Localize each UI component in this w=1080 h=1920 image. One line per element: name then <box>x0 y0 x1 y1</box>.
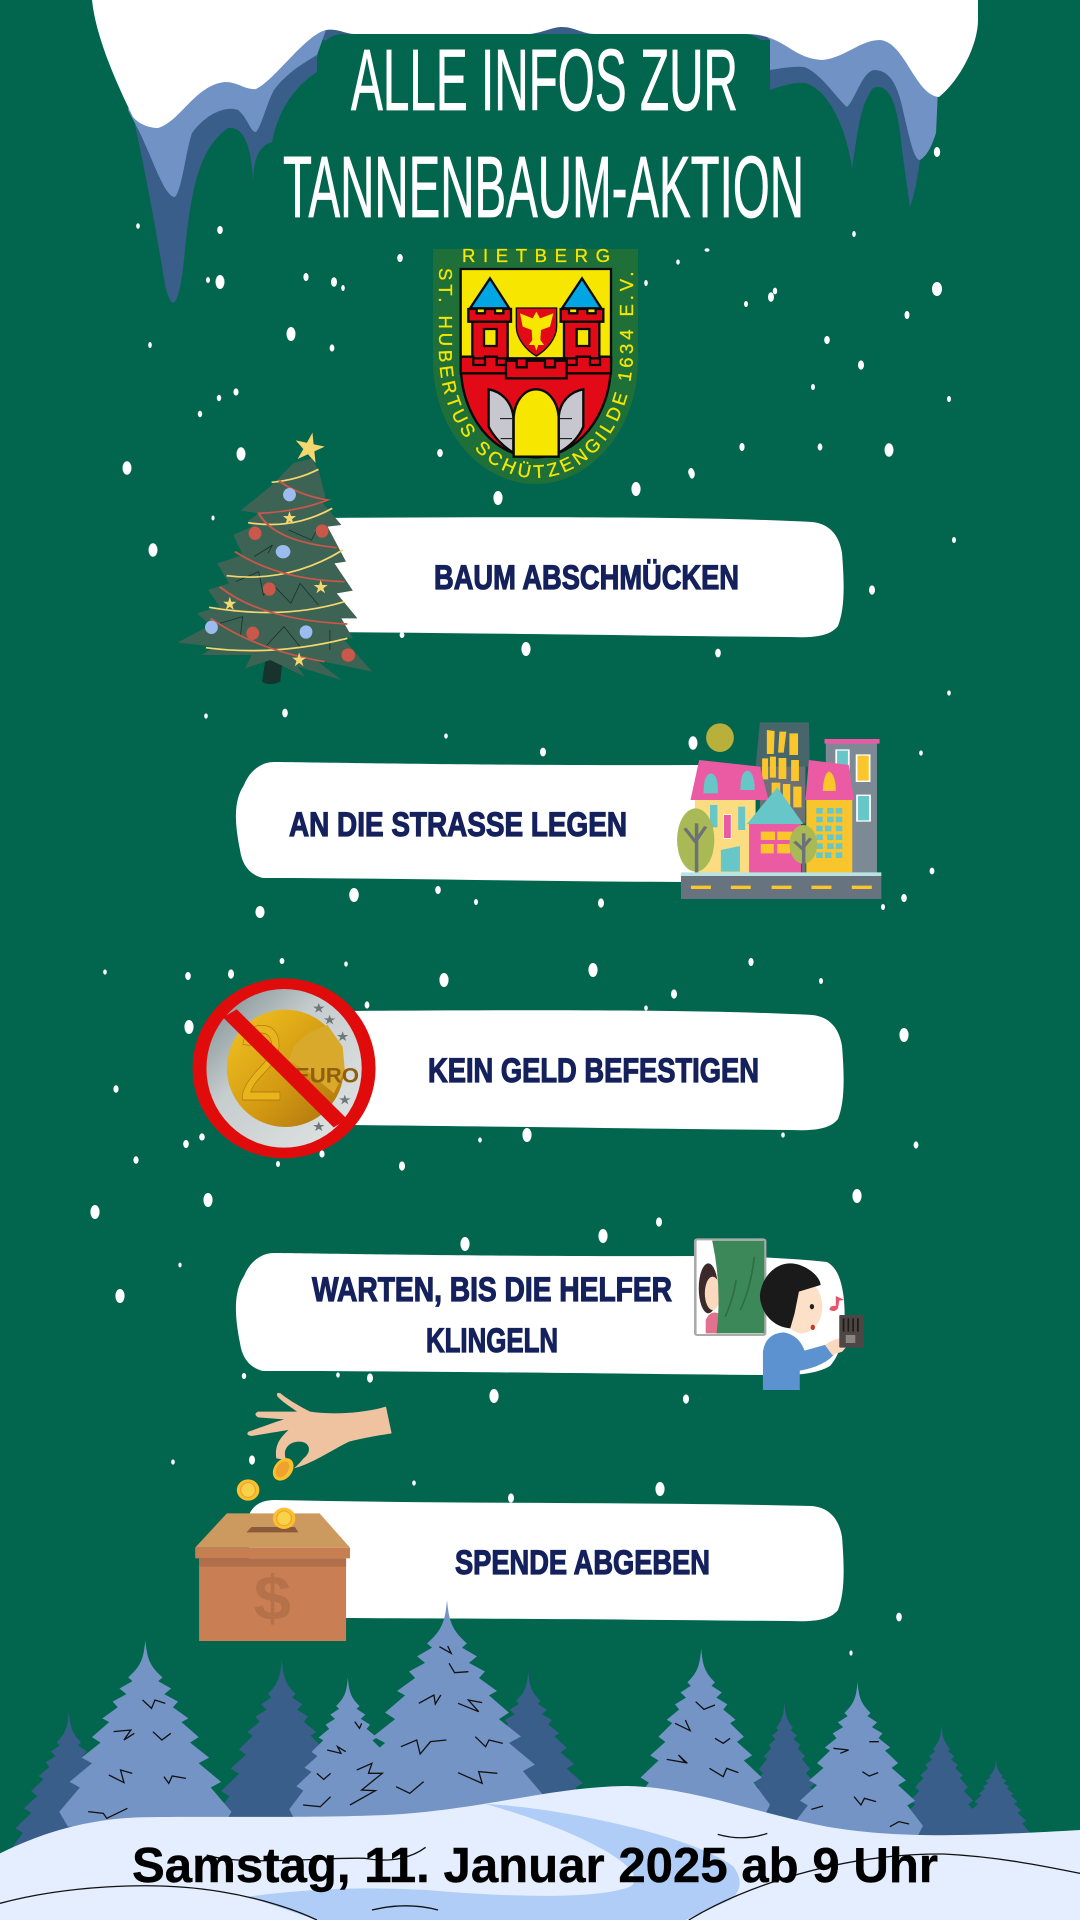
icon: hand dropping coins into donation box <box>195 1393 392 1641</box>
logo: Rietberg guild crest <box>433 245 638 484</box>
boy eye and mouth <box>810 1304 815 1330</box>
curtain folds <box>725 1257 754 1317</box>
crest: badge lettering: ST. HUBERTUS SCHÜTZENGILDE 1634 E.V. <box>438 268 634 478</box>
snow contour lines <box>0 1833 1080 1920</box>
coins <box>237 1456 297 1529</box>
box lid top <box>195 1513 350 1548</box>
tree trunk <box>262 653 283 684</box>
icicles: dark blue layer <box>135 10 930 303</box>
crest: shield <box>461 269 611 457</box>
icon: crossed-out two euro coin <box>200 984 369 1153</box>
stars <box>223 430 328 666</box>
icon: boy ringing doorbell and girl behind curtain <box>695 1239 864 1390</box>
hand <box>247 1393 392 1468</box>
panel: kein geld befestigen: KEIN GELD BEFESTIGEN <box>428 1052 759 1090</box>
boy body <box>763 1332 834 1390</box>
coin gold centre <box>227 1010 344 1127</box>
title: ALLE INFOS ZUR <box>351 32 738 129</box>
forest <box>8 1600 1030 1865</box>
panel: warten bis die helfer klingeln <box>236 1253 845 1375</box>
boy face <box>782 1280 822 1333</box>
yellow garlands <box>206 469 347 651</box>
box body <box>199 1558 346 1641</box>
red garlands <box>211 481 347 662</box>
blue baubles <box>205 488 312 639</box>
right house <box>806 799 852 873</box>
box slot <box>246 1527 298 1532</box>
light spruces <box>59 1600 923 1838</box>
panel: baum abschmuecken: BAUM ABSCHMÜCKEN <box>434 559 739 597</box>
title backing plate <box>317 34 770 114</box>
date line: Samstag, 11. Januar 2025 ab 9 Uhr <box>132 1839 938 1893</box>
middle house <box>749 824 801 873</box>
dark spruces <box>8 1659 1030 1865</box>
doorbell <box>839 1315 864 1348</box>
road <box>681 872 881 876</box>
girl peeking <box>699 1263 720 1333</box>
curtain <box>712 1241 764 1333</box>
snowfall dots <box>90 147 956 1656</box>
music note <box>829 1296 844 1311</box>
panel: kein geld befestigen <box>340 1010 844 1130</box>
panel: spende abgeben <box>249 1500 844 1621</box>
grey tower windows <box>835 749 871 822</box>
trees <box>677 808 817 873</box>
snow hills <box>0 1786 1080 1920</box>
panel: an die strasse legen <box>236 762 700 882</box>
coin stars <box>313 1003 351 1131</box>
high-rise windows <box>762 730 802 807</box>
panel: baum abschmuecken <box>320 517 844 637</box>
panel: an die strasse legen: AN DIE STRASSE LEGEN <box>289 806 627 844</box>
grey tower <box>826 740 877 873</box>
crest: badge lettering: RIETBERG <box>462 245 610 266</box>
boy finger <box>825 1338 849 1355</box>
spruce scribbles <box>88 1646 909 1827</box>
coin numeral: 2 <box>239 1004 284 1123</box>
snowy ground <box>0 1786 1080 1920</box>
coin map of Europe <box>288 1025 345 1093</box>
prohibition sign <box>200 984 369 1153</box>
panel: warten bis die helfer klingeln: KLINGELN <box>426 1322 558 1360</box>
box lid front <box>195 1548 350 1558</box>
tree body <box>177 458 372 680</box>
tree needle strokes <box>220 527 330 650</box>
icicles: light blue layer <box>128 10 938 197</box>
right house windows <box>816 808 842 858</box>
high-rise <box>756 722 810 767</box>
panel: spende abgeben: SPENDE ABGEBEN <box>455 1544 710 1582</box>
box band <box>199 1558 346 1567</box>
icon: town houses on a street <box>677 722 881 899</box>
icon: christmas tree <box>177 430 372 684</box>
title <box>283 32 804 236</box>
snow path <box>248 1804 740 1920</box>
snow cap on top <box>92 0 978 128</box>
boy hair <box>760 1263 821 1328</box>
coin silver ring <box>204 988 364 1148</box>
coin lettering: EURO <box>295 1064 359 1088</box>
box dollar sign: $ <box>254 1562 291 1634</box>
crest: green badge <box>433 249 638 484</box>
moon <box>706 723 734 752</box>
window frame <box>695 1239 765 1335</box>
red baubles <box>246 524 355 662</box>
panel: warten bis die helfer klingeln: WARTEN, BIS DIE HELFER <box>312 1271 672 1309</box>
left house <box>695 799 756 873</box>
